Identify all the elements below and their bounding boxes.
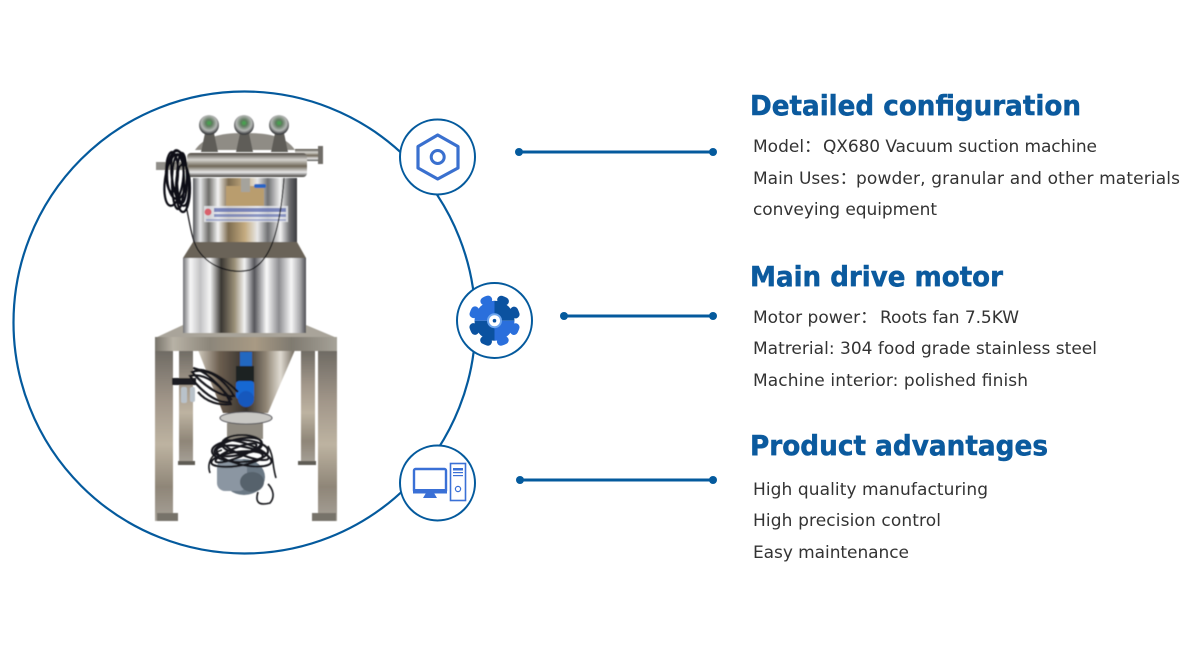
shoulder: [183, 242, 306, 258]
connector: top arrow line: [515, 148, 717, 156]
text block: configuration details: [753, 137, 1180, 220]
text block: advantages list: High precision control: [753, 511, 941, 531]
text block: configuration details: QX680 Vacuum suction machine: [823, 137, 1097, 157]
text block: advantages list: Easy maintenance: [753, 543, 909, 563]
icon: desktop computer: [400, 446, 475, 520]
text block: configuration details: Model：: [753, 137, 821, 157]
connector: middle arrow line: [560, 312, 717, 320]
lower cable coil: [209, 434, 276, 504]
text block: motor details: [753, 308, 1097, 391]
dome lid: [195, 133, 295, 150]
frame top plate: [155, 325, 337, 338]
connector: bottom arrow line: [516, 476, 717, 484]
large product circle outline: [14, 92, 476, 554]
black cable bundle: [161, 149, 284, 271]
outlet flange and neck: [220, 412, 272, 439]
blue butterfly valve: [236, 352, 254, 407]
front frame legs: [155, 351, 337, 521]
text block: advantages list: High quality manufacturing: [753, 480, 988, 500]
heading: Detailed configuration: Detailed configuration: [750, 89, 1081, 122]
text block: configuration details: powder, granular and other materials: [856, 169, 1180, 189]
lower conical hopper: [198, 350, 295, 413]
left stub: [156, 162, 188, 170]
heading: Product advantages: Product advantages: [750, 429, 1048, 462]
back frame legs: [178, 350, 316, 465]
icon: hex nut: [400, 120, 475, 194]
icon: puzzle gear: [457, 283, 532, 358]
product photo: vacuum suction machine: [155, 115, 337, 521]
text block: configuration details: Main Uses：: [753, 169, 857, 189]
text block: advantages list: [753, 480, 988, 563]
electric motor: [217, 459, 265, 495]
text block: motor details: Matrerial: 304 food grade stainless steel: [753, 339, 1097, 359]
horizontal manifold pipe: [187, 153, 307, 177]
text block: motor details: Motor power：: [753, 308, 877, 328]
inner sight window: [226, 186, 264, 206]
three pneumatic valves: [199, 115, 289, 152]
text block: motor details: Machine interior: polished finish: [753, 371, 1028, 391]
heading: Main drive motor: Main drive motor: [750, 260, 1003, 293]
text block: configuration details: conveying equipment: [753, 200, 937, 220]
air filter regulator: [172, 378, 196, 403]
text block: motor details: Roots fan 7.5KW: [880, 308, 1019, 328]
upper cylinder: [193, 178, 297, 242]
upper cable coil on hopper: [190, 368, 238, 404]
right outlet stub: [295, 146, 323, 164]
lower cylinder: [183, 258, 306, 333]
brass fitting and blue handle: [241, 178, 266, 192]
frame top beam: [155, 337, 337, 351]
maker label: [204, 206, 288, 222]
